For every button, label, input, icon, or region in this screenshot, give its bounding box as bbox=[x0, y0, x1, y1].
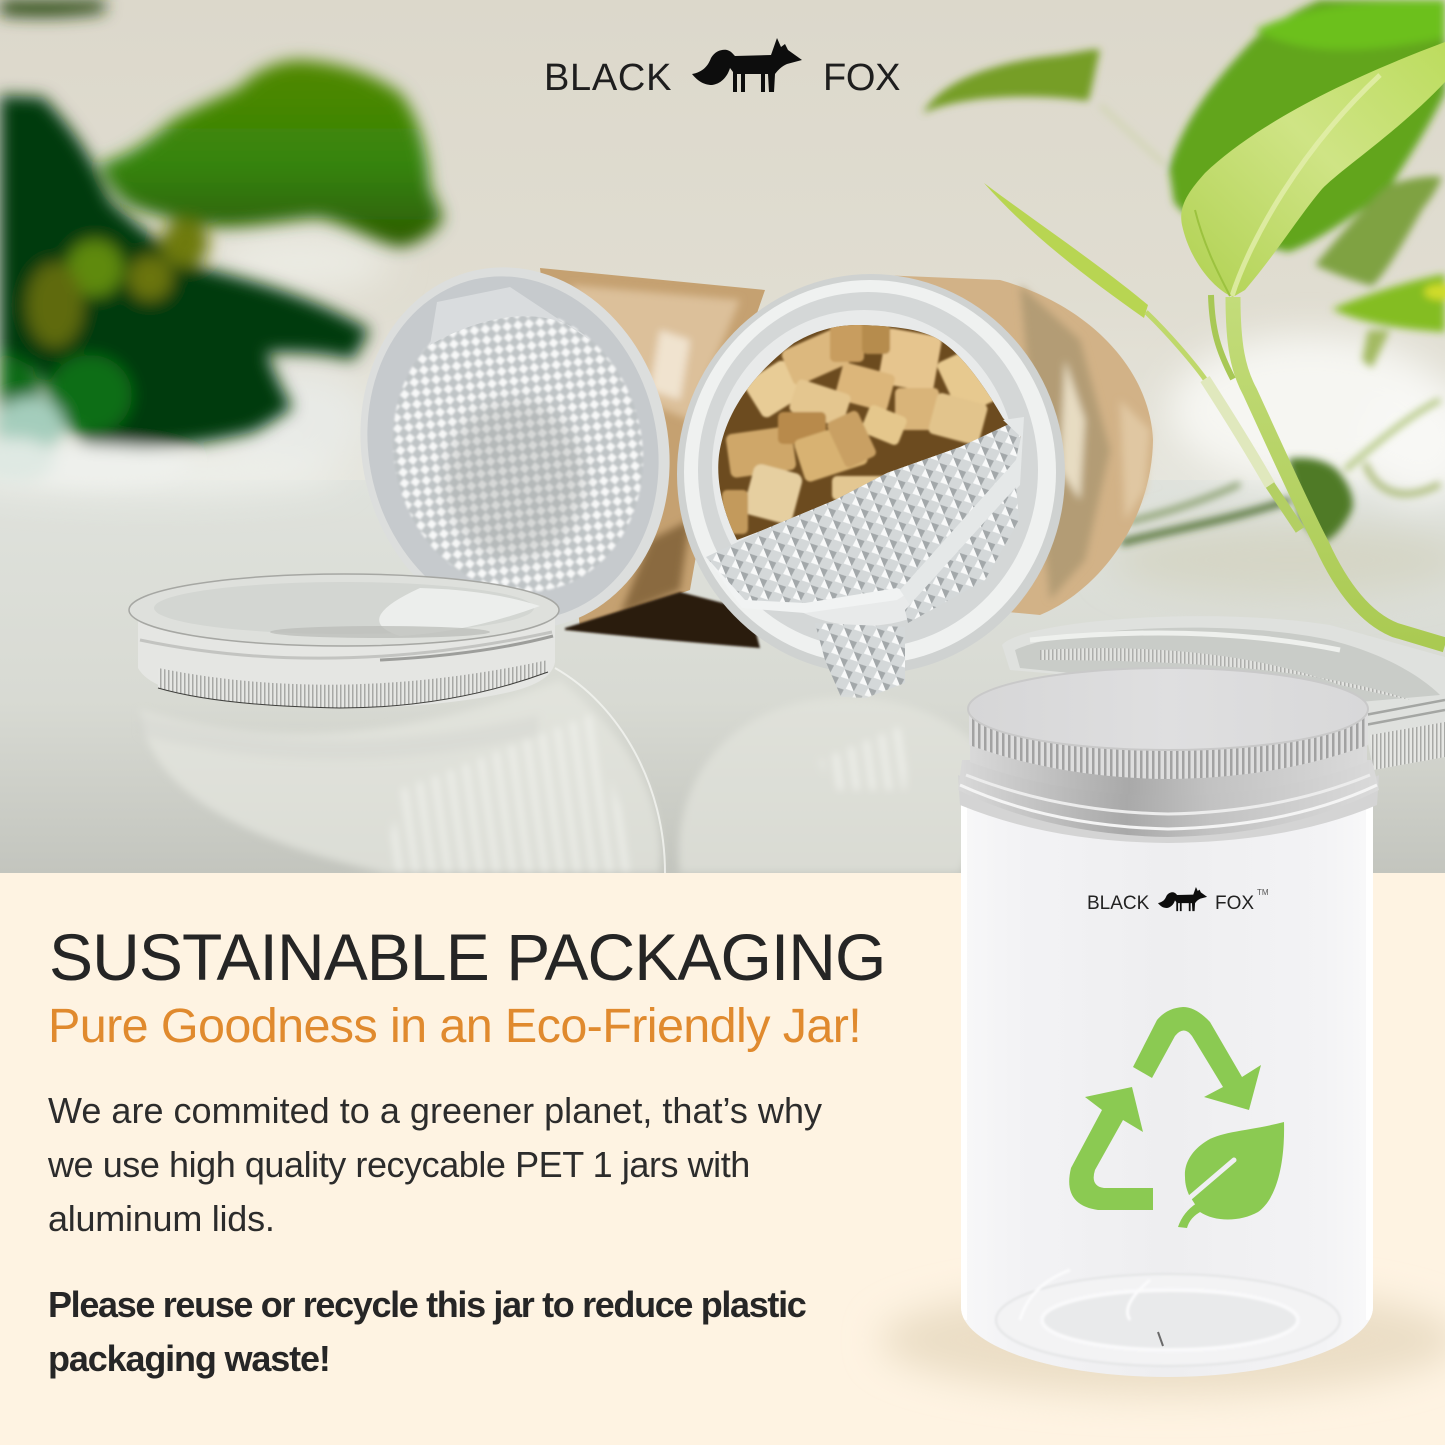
aluminum lid bbox=[968, 668, 1368, 779]
left jar bbox=[360, 268, 765, 625]
call to action text: Please reuse or recycle this jar to reduce plastic bbox=[48, 1284, 805, 1325]
body text bbox=[48, 1090, 822, 1239]
shadow between jars bbox=[565, 592, 760, 648]
body text: aluminum lids. bbox=[48, 1198, 275, 1239]
jar floor shadow bbox=[880, 1285, 1445, 1395]
right jar bbox=[677, 274, 1153, 698]
heading: SUSTAINABLE PACKAGING bbox=[49, 920, 885, 994]
logo: Black Fox top bbox=[544, 38, 900, 99]
logo: Black Fox top: BLACK bbox=[544, 57, 672, 99]
logo: Black Fox top: FOX bbox=[823, 57, 900, 99]
call to action text bbox=[48, 1284, 806, 1379]
stem and sharp leaf bbox=[984, 42, 1445, 645]
icon: small fox silhouette bbox=[1158, 887, 1207, 912]
icon: fox silhouette bbox=[692, 38, 802, 92]
food pieces bbox=[722, 322, 1000, 534]
icon: recycling arrows with leaf bbox=[1069, 1007, 1284, 1228]
logo: Black Fox on jar: BLACK bbox=[1087, 893, 1149, 914]
product jar bbox=[958, 668, 1379, 1377]
body text: we use high quality recycable PET 1 jars with bbox=[48, 1144, 750, 1185]
subheading: Pure Goodness in an Eco-Friendly Jar! bbox=[48, 999, 861, 1053]
call to action text: packaging waste! bbox=[48, 1338, 330, 1379]
right aluminum lid bbox=[1002, 616, 1445, 770]
left blurred plant bbox=[0, 0, 443, 485]
logo: Black Fox on jar: TM bbox=[1257, 888, 1269, 897]
body text: We are commited to a greener planet, that’s why bbox=[48, 1090, 822, 1131]
jar neck flange bbox=[958, 775, 1379, 843]
left aluminum lid bbox=[129, 574, 559, 708]
peeled seal bbox=[706, 417, 1024, 612]
panel: cream text background bbox=[0, 873, 1445, 1445]
bright blurred background patches bbox=[0, 232, 1445, 596]
logo: Black Fox on jar bbox=[1087, 887, 1269, 914]
right blurred leaves bbox=[923, 0, 1445, 543]
reflection arc bbox=[555, 668, 665, 873]
seal pull tab bbox=[815, 623, 905, 698]
logo: Black Fox on jar: FOX bbox=[1215, 893, 1254, 914]
table reflections bbox=[140, 680, 1000, 873]
